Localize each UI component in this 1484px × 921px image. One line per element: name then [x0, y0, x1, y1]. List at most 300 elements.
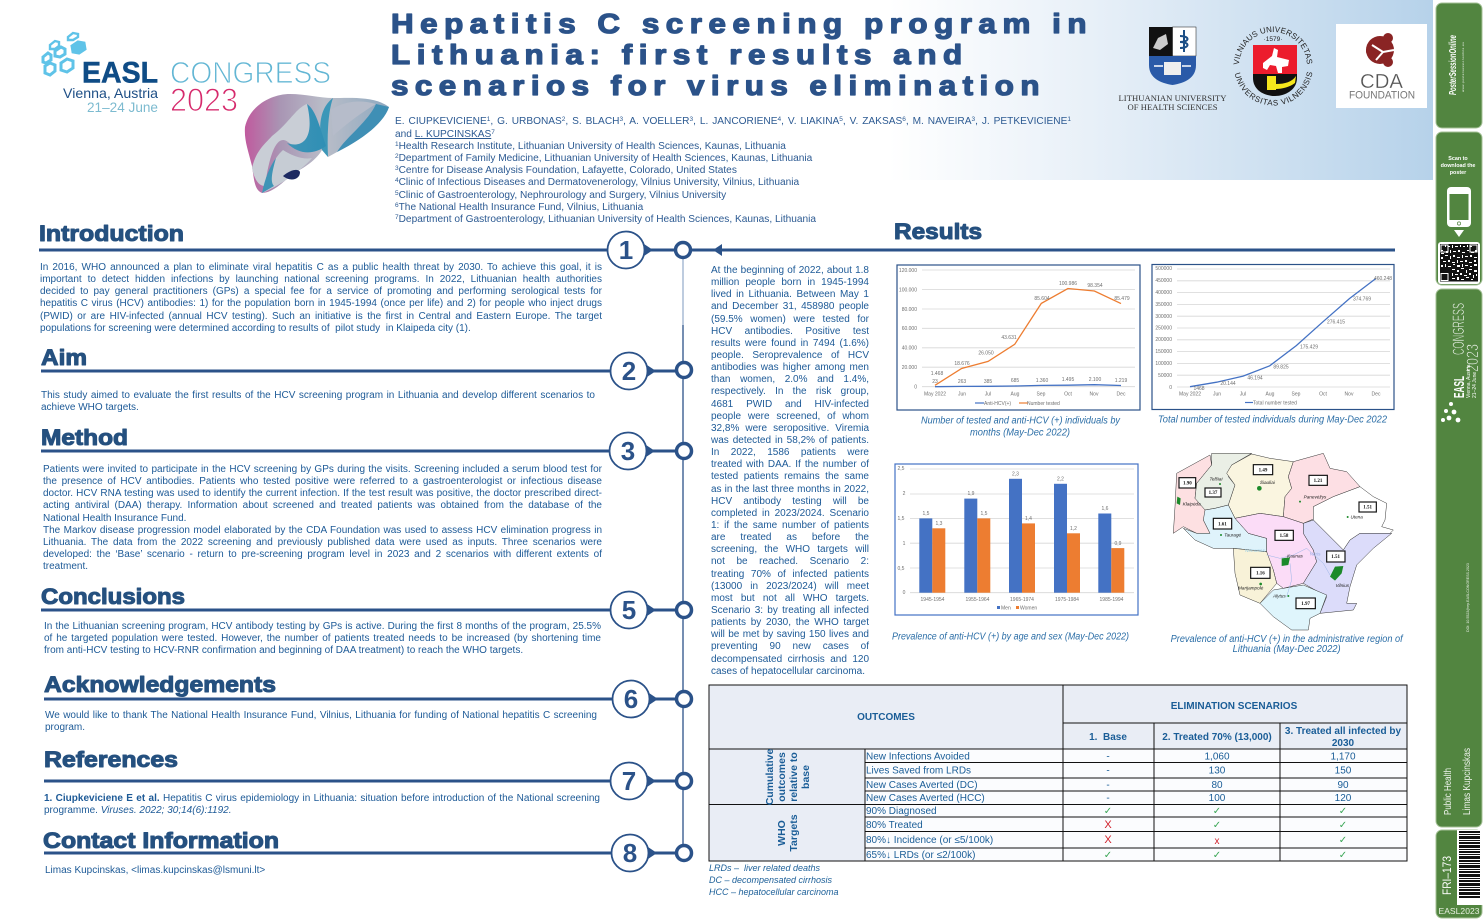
table row: new infections: -: [1106, 752, 1110, 762]
heading: References: References: [44, 747, 178, 772]
text block: results: patients by 2030, the WHO target: [711, 617, 869, 628]
text block: aim: This study aimed to evaluate the first results of the HCV screening program in Lithuania and develop different scenarios to: [41, 390, 595, 401]
heading: Results: Results: [894, 219, 982, 244]
bar chart: prevalence by age and sex: 1,5: [981, 511, 988, 517]
table row: incidence: [866, 834, 1347, 847]
text block: aim: achieve WHO targets.: [41, 402, 139, 413]
sidebar: scan to download panel: download the: [1441, 163, 1475, 169]
marker: number 6: [612, 680, 692, 718]
text block: method: The Markov disease progression model elaborated by the CDA Foundation was used to assess HCV elimination progress in: [43, 525, 602, 536]
text block: introduction: hepatitis C virus (HCV) antibodies: 1) for the population born in 1945-1994 (once per life) and 2) for people who inject drugs: [40, 298, 602, 309]
table row: diagnosed: ✓: [1104, 806, 1112, 817]
map: Lithuania administrative regions: 1.16: [1256, 571, 1265, 576]
logo: Vilnius University seal: [1233, 26, 1312, 106]
text block: introduction: decided to pay general practitioners (GPs) a special fee for a service of promoting and performing serological tests for: [40, 286, 602, 297]
text block: results: screening, the WHO targets will: [711, 544, 869, 555]
text block: references: programme. Viruses. 2022; 30;14(6):1192.: [44, 805, 232, 816]
marker: number 3: 3: [621, 436, 635, 466]
table row: LRDs: ✓: [1339, 850, 1347, 861]
icon: phone: [1447, 187, 1471, 227]
table row: lives saved: 150: [1335, 766, 1352, 776]
text block: conclusions: In the Lithuanian screening program, HCV antibody testing by GPs is active. During the first 8 months of the program, 25.5%: [44, 621, 601, 632]
line chart: tested and anti-HCV by month: 80.000: [902, 307, 917, 313]
logo: Vilnius University seal: UNIVERSITAS VILNENSIS: [1235, 72, 1312, 106]
text block: method: Patients were invited to participate in the HCV screening by GPs during the visits. Screening included a serum blood test for: [43, 464, 602, 475]
line chart: tested and anti-HCV by month: Aug: [1011, 392, 1020, 398]
line chart: total number tested: May 2022: [1179, 392, 1201, 398]
line chart: tested and anti-HCV by month: 685: [1011, 378, 1019, 384]
text block: results: was detected in 58,2% of patients.: [711, 435, 869, 446]
icon: EASL hexagons: [43, 33, 85, 75]
line chart: tested and anti-HCV by month: 1.360: [1036, 378, 1048, 384]
table row: LRDs: [866, 850, 1347, 861]
table: outcomes and elimination scenarios: outcomes: [776, 752, 788, 802]
map: Lithuania administrative regions: Šiauliai: [1260, 479, 1276, 485]
bar chart: prevalence by age and sex: 0: [903, 590, 906, 596]
title: Lithuania: first results and: [391, 40, 962, 71]
authors and affiliations: 5Clinic of Gastroenterology, Nephrourology and Surgery, Vilnius University: [395, 190, 726, 201]
map: Lithuania administrative regions: 1.49: [1259, 468, 1268, 473]
text block: results: 1: if the same number of patients: [711, 520, 869, 531]
line chart: tested and anti-HCV by month: [896, 264, 1141, 438]
bar chart: prevalence by age and sex: 1,5: [898, 516, 905, 522]
heading: Aim: [41, 345, 684, 372]
marker: number 8: 8: [623, 838, 637, 868]
text block: results: (59.5% women) were tested for: [711, 314, 869, 325]
text block: conclusions: [44, 621, 601, 656]
sidebar: congress and presenter panel: 2023: [1463, 344, 1482, 372]
text block: results: In 2022, 1586 patients were: [711, 447, 869, 458]
text block: method: [43, 464, 602, 572]
bar chart: prevalence by age and sex: 1,5: [923, 511, 930, 517]
table: outcomes and elimination scenarios: 3. Treated all infected by: [1285, 726, 1402, 737]
text block: method: Lithuania. The data from the 2022 screening and previously published data were used as inputs. Three scenarios were: [43, 537, 602, 548]
table row: new infections: 1,170: [1330, 752, 1356, 762]
marker: number 8: [612, 834, 692, 872]
line chart: total number tested: 374.769: [1353, 296, 1371, 302]
line chart: tested and anti-HCV by month: Jun: [958, 392, 966, 398]
table row: new infections: New Infections Avoided: [866, 752, 970, 762]
table row: LRDs: ✓: [1104, 850, 1112, 861]
line chart: tested and anti-HCV by month: Oct: [1064, 392, 1072, 398]
marker: number 2: [610, 352, 692, 390]
sidebar: PosterSessionOnline panel: [1436, 2, 1482, 128]
sidebar: congress and presenter panel: Limas Kupcinskas: [1462, 748, 1473, 815]
heading: Acknowledgements: [44, 672, 684, 700]
heading: Conclusions: [41, 584, 684, 612]
line chart: total number tested: 250000: [1155, 326, 1172, 332]
map: Lithuania administrative regions: Telšiai: [1209, 477, 1223, 482]
bar chart: prevalence by age and sex: [892, 463, 1139, 642]
heading: Contact Information: [43, 828, 684, 854]
text block: introduction: (PWID) or are HIV-infected (annual HCV testing). Such an initiative is the first in Central and Eastern Europe. The target: [40, 311, 602, 322]
map: Lithuania administrative regions: Marijampolė: [1238, 586, 1264, 591]
text block: results: lived in Lithuania. Between May 1: [711, 289, 869, 300]
text block: method: the presence of HCV antibodies. Patients who tested positive were referred to a gastroenterologist or infectious disease: [43, 476, 602, 487]
text block: results: will be met by saving 150 lives and: [711, 629, 869, 640]
table row: DC: [866, 780, 1349, 791]
text block: results: than women, 2.0% and 1.4%,: [711, 374, 869, 385]
text block: results: not be reached. Scenario 2:: [711, 556, 869, 567]
line chart: total number tested: 200000: [1155, 337, 1172, 343]
bar chart: prevalence by age and sex: Men: [1001, 606, 1011, 612]
table row: LRDs: ✓: [1213, 850, 1221, 861]
table row: HCC: 100: [1209, 793, 1226, 804]
line chart: tested and anti-HCV by month: 120.000: [899, 268, 917, 274]
line chart: tested and anti-HCV by month: 1.468: [931, 371, 943, 377]
table row: DC: New Cases Averted (DC): [866, 780, 978, 791]
marker: number 2: 2: [622, 356, 636, 386]
line chart: total number tested: 300000: [1155, 314, 1172, 320]
sidebar: congress and presenter panel: Vienna, Austria: [1466, 364, 1472, 398]
table: outcomes and elimination scenarios: OUTCOMES: [857, 712, 915, 723]
bar chart: prevalence by age and sex: 2,2: [1057, 476, 1064, 482]
line chart: total number tested: Nov: [1345, 392, 1354, 398]
authors and affiliations: 2Department of Family Medicine, Lithuanian University of Health Sciences, Kaunas, Lithuania: [395, 153, 812, 164]
sidebar: scan to download panel: Scan to: [1448, 156, 1468, 162]
table abbreviations note: DC – decompensated cirrhosis: [709, 875, 832, 885]
heading: Method: Method: [41, 425, 128, 450]
EASL Congress logo: Vienna, Austria: [63, 85, 158, 101]
text block: method: acting antiviral (DAA) therapy. Information about screened and treated patients was obtained from the database of the: [43, 500, 602, 511]
text block: results: most but not all WHO targets.: [711, 593, 869, 604]
authors and affiliations: and L. KUPCINSKAS7: [395, 129, 495, 140]
heading: Acknowledgements: Acknowledgements: [44, 672, 276, 697]
sidebar: congress and presenter panel: Public Health: [1443, 768, 1454, 815]
map: Lithuania administrative regions: [1170, 453, 1404, 655]
line chart: tested and anti-HCV by month: Dec: [1117, 392, 1126, 398]
heading: Results: [690, 219, 1395, 256]
line chart: total number tested: 460.248: [1374, 276, 1392, 282]
map: Lithuania administrative regions: Klaipėda: [1183, 501, 1201, 506]
line chart: total number tested: 150000: [1155, 349, 1172, 355]
table row: HCC: New Cases Averted (HCC): [866, 793, 985, 804]
table row: incidence: x: [1214, 836, 1220, 847]
line chart: total number tested: 276.415: [1327, 320, 1345, 326]
text block: results: people were screened, of whom: [711, 411, 869, 422]
bar chart: prevalence by age and sex: 2,5: [898, 466, 905, 472]
table: outcomes and elimination scenarios: 2030: [1332, 738, 1355, 749]
authors and affiliations: 4Clinic of Infectious Diseases and Dermatovenerology, Vilnius University, Vilnius, Lithuania: [395, 177, 799, 188]
text block: results: people. Seroprevalence of HCV: [711, 350, 869, 361]
text block: results: HCV antibodies. Positive test: [711, 326, 869, 337]
marker: number 7: [610, 762, 692, 800]
text block: introduction: In 2016, WHO announced a plan to eliminate viral hepatitis C as a public health threat by 2030. To achieve this goal, it is: [40, 262, 602, 273]
line chart: total number tested: 175.429: [1300, 344, 1318, 350]
EASL Congress logo: 21–24 June: [87, 100, 158, 115]
title: [391, 9, 1087, 102]
logo: Lithuanian University of Health Sciences: [1118, 26, 1226, 112]
table: outcomes and elimination scenarios: relative to: [788, 752, 800, 802]
barcode: [1459, 831, 1480, 898]
logo: CDA Foundation: CDA: [1360, 71, 1404, 93]
bar chart: prevalence by age and sex: 1,2: [1070, 526, 1077, 532]
marker: number 1: 1: [619, 235, 633, 265]
line chart: tested and anti-HCV by month: Sep: [1037, 392, 1046, 398]
line chart: tested and anti-HCV by month: Number tested: [1027, 401, 1060, 407]
line chart: tested and anti-HCV by month: May 2022: [924, 392, 946, 398]
table: outcomes and elimination scenarios: ELIMINATION SCENARIOS: [1171, 701, 1298, 712]
line chart: tested and anti-HCV by month: Anti-HCV(+): [984, 401, 1011, 407]
line chart: tested and anti-HCV by month: 100.000: [899, 288, 917, 294]
table abbreviations note: HCC – hepatocellular carcinoma: [709, 887, 839, 897]
sidebar: poster code and barcode panel: [1436, 830, 1482, 918]
sidebar: scan to download panel: [1436, 132, 1482, 286]
text block: introduction: populations for screening were determined according to results of pilot study in Klaipeda city (1).: [40, 323, 471, 334]
line chart: tested and anti-HCV by month: Number of tested and anti-HCV (+) individuals by: [921, 416, 1121, 426]
marker: number 7: 7: [622, 766, 636, 796]
heading: Method: [41, 425, 684, 452]
bar chart: prevalence by age and sex: 1955-1964: [966, 597, 990, 603]
text block: acknowledgements: program.: [45, 722, 85, 733]
line chart: total number tested: [1151, 264, 1395, 426]
line chart: tested and anti-HCV by month: 85.604: [1034, 296, 1050, 302]
map: Lithuania administrative regions: Utena: [1350, 514, 1363, 519]
text block: method: treatment.: [43, 561, 88, 572]
marker: number 1: [608, 232, 690, 268]
text block: results: decompensated cirrhosis and 120: [711, 654, 869, 664]
line chart: tested and anti-HCV by month: 26.050: [978, 350, 994, 356]
text block: acknowledgements: We would like to thank The National Health Insurance Fund, Vilnius, Lithuania for funding of National hepatitis C screening: [45, 710, 597, 721]
line chart: tested and anti-HCV by month: 20.000: [902, 365, 917, 371]
line chart: tested and anti-HCV by month: 1.219: [1115, 378, 1127, 384]
logo: Lithuanian University of Health Sciences: OF HEALTH SCIENCES: [1128, 102, 1218, 112]
line chart: tested and anti-HCV by month: 40.000: [902, 346, 917, 352]
icon: down arrow: [1454, 230, 1464, 237]
text block: results: preventing 90 new cases of: [711, 641, 869, 652]
text block: results: HCV antibody testing will be: [711, 496, 869, 507]
line chart: total number tested: 20.144: [1220, 381, 1236, 387]
line chart: tested and anti-HCV by month: 23: [932, 379, 938, 385]
text block: results: as in the last three months in 2022,: [711, 484, 869, 495]
table row: DC: -: [1106, 780, 1110, 791]
text block: results: 4681 PWID and HIV-infected: [711, 399, 869, 410]
line chart: tested and anti-HCV by month: 0: [914, 384, 917, 390]
bar chart: prevalence by age and sex: 1,4: [1025, 516, 1032, 522]
table row: treated: ✓: [1339, 820, 1347, 831]
heading: Aim: Aim: [41, 345, 87, 370]
logo: Vilnius University seal: ·1579·: [1264, 36, 1282, 43]
table row: diagnosed: [866, 806, 1347, 817]
table row: lives saved: -: [1106, 766, 1110, 776]
bar chart: prevalence by age and sex: 1,9: [968, 491, 975, 497]
table row: diagnosed: 90% Diagnosed: [866, 806, 937, 817]
line chart: tested and anti-HCV by month: Nov: [1090, 392, 1099, 398]
authors and affiliations: [395, 116, 1071, 225]
line chart: tested and anti-HCV by month: 263: [958, 379, 966, 385]
sidebar: congress and presenter panel: DOI: 10.5523/jhep.EASLCONGRESS.2023: [1466, 563, 1470, 632]
logo: Lithuanian University of Health Sciences: LITHUANIAN UNIVERSITY: [1118, 93, 1226, 103]
line chart: total number tested: Total number of tested individuals during May-Dec 2022: [1158, 414, 1387, 426]
authors and affiliations: 1Health Research Institute, Lithuanian University of Health Sciences, Kaunas, Lithuania: [395, 141, 786, 152]
sidebar: scan to download panel: poster: [1450, 170, 1467, 176]
line chart: total number tested: Sep: [1292, 392, 1301, 398]
logo: CDA Foundation: FOUNDATION: [1349, 90, 1415, 102]
heading: Introduction: [39, 221, 683, 252]
text block: references: 1. Ciupkeviciene E et al. Hepatitis C virus epidemiology in Lithuania: situation before introduction of the National screening: [44, 793, 600, 804]
table row: LRDs: 65%↓ LRDs (or ≤2/100k): [866, 850, 975, 861]
bar chart: prevalence by age and sex: 1965-1974: [1010, 597, 1034, 603]
bar chart: prevalence by age and sex: 0,5: [898, 566, 905, 572]
header gradient band: [0, 0, 1433, 180]
line chart: total number tested: 450000: [1155, 278, 1172, 284]
heading: References: [44, 747, 684, 782]
text block: method: developed: the ‘Base’ scenario - return to pre-screening program level in 2023 and 2 scenarios with different extents of: [43, 549, 602, 560]
title: scenarios for virus elimination: [391, 71, 1039, 102]
text block: acknowledgements: [45, 710, 597, 733]
QR code: [1438, 242, 1480, 284]
heading: Conclusions: Conclusions: [41, 584, 185, 609]
sidebar: congress and presenter panel: EASL: [1451, 376, 1468, 398]
table: outcomes and elimination scenarios: Targets: [788, 814, 800, 852]
sidebar: congress and presenter panel: 21–24 June: [1472, 372, 1478, 398]
text block: method: doctor. HCV RNA testing was used to identify the current infection. If the test result was positive, the doctor prescribed direct-: [43, 488, 602, 499]
table row: incidence: 80%↓ Incidence (or ≤5/100k): [866, 835, 993, 846]
line chart: tested and anti-HCV by month: 18.676: [954, 361, 970, 367]
table row: new infections: 1,060: [1204, 752, 1230, 762]
bar chart: prevalence by age and sex: 1945-1954: [921, 597, 945, 603]
table: outcomes and elimination scenarios: WHO: [776, 820, 788, 846]
map: Lithuania administrative regions: 1.51: [1363, 506, 1373, 511]
line chart: tested and anti-HCV by month: 60.000: [902, 326, 917, 332]
authors and affiliations: E. CIUPKEVICIENE1, G. URBONAS2, S. BLACH3, A. VOELLER3, L. JANCORIENE4, V. LIAKINA5, V. ZAKSAS6, M. NAVEIRA3, J. PETKEVICIENE1: [395, 116, 1071, 126]
text block: results: results were found in 7494 (1.6%): [711, 338, 869, 349]
sidebar: poster code and barcode panel: EASL2023: [1438, 906, 1480, 916]
table row: HCC: 120: [1335, 793, 1352, 804]
table row: HCC: [866, 793, 1352, 804]
line chart: total number tested: Aug: [1266, 392, 1275, 398]
table row: HCC: -: [1106, 793, 1110, 804]
bar chart: prevalence by age and sex: 1: [903, 541, 906, 547]
line chart: tested and anti-HCV by month: 2.100: [1089, 377, 1101, 383]
line chart: total number tested: 100000: [1155, 361, 1172, 367]
line chart: total number tested: 0: [1169, 385, 1172, 391]
table row: incidence: X: [1104, 834, 1112, 846]
table abbreviations note: [709, 863, 839, 897]
table row: new infections: [866, 752, 1356, 762]
logo: CDA Foundation: [1336, 24, 1427, 108]
map: Lithuania administrative regions: 1.21: [1314, 479, 1323, 484]
line chart: tested and anti-HCV by month: 385: [984, 379, 992, 385]
map: Lithuania administrative regions: 1.51: [1331, 555, 1341, 560]
text block: results: respectively. In the risk group,: [711, 386, 869, 397]
text block: conclusions: from anti-HCV testing to HCV-RNR confirmation and beginning of DAA treatment) to reach the WHO targets.: [44, 645, 523, 656]
bar chart: prevalence by age and sex: 1985-1994: [1100, 597, 1124, 603]
text block: results: million people born in 1945-1994: [711, 277, 869, 288]
map: Lithuania administrative regions: Tauragė: [1224, 532, 1242, 537]
marker: number 5: [610, 592, 692, 628]
table row: DC: 80: [1211, 780, 1223, 791]
text block: results: [711, 265, 870, 677]
table row: treated: 80% Treated: [866, 820, 923, 831]
map: Lithuania administrative regions: Vilnius: [1336, 583, 1350, 588]
title: Hepatitis C screening program in: [391, 9, 1087, 40]
line chart: tested and anti-HCV by month: 43.631: [1001, 335, 1017, 341]
bar chart: prevalence by age and sex: 1,3: [936, 521, 943, 527]
line chart: total number tested: Oct: [1319, 392, 1327, 398]
map: Lithuania administrative regions: Nemunas: [1245, 548, 1266, 553]
line chart: tested and anti-HCV by month: 100.986: [1059, 281, 1077, 287]
line chart: total number tested: 50000: [1158, 373, 1172, 379]
table: outcomes and elimination scenarios: 2. Treated 70% (13,000): [1162, 732, 1272, 743]
table row: diagnosed: ✓: [1213, 806, 1221, 817]
text block: results: completed in 2023/2024. Scenario: [711, 508, 869, 519]
table row: treated: X: [1104, 819, 1112, 831]
text block: results: cases of hepatocellular carcinoma.: [711, 666, 865, 677]
line chart: total number tested: Total number tested: [1253, 400, 1297, 406]
text block: results: 32,8% were seropositive. Viremia: [711, 423, 869, 434]
bar chart: prevalence by age and sex: 1,6: [1102, 506, 1109, 512]
marker: number 5: 5: [622, 595, 636, 625]
sidebar: poster code and barcode panel: FRI–173: [1440, 856, 1454, 895]
table row: lives saved: 130: [1209, 766, 1226, 776]
table row: diagnosed: ✓: [1339, 806, 1347, 817]
table: outcomes and elimination scenarios: base: [800, 765, 812, 789]
text block: results: At the beginning of 2022, about 1.8: [711, 265, 869, 276]
table row: lives saved: [866, 766, 1352, 776]
table row: DC: 90: [1337, 780, 1349, 791]
icon: liver illustration: [244, 94, 389, 193]
table: outcomes and elimination scenarios: [708, 684, 1408, 862]
bar chart: prevalence by age and sex: Women: [1020, 606, 1037, 612]
map: Lithuania administrative regions: Alytus: [1272, 593, 1286, 598]
table: outcomes and elimination scenarios: Cumulative: [764, 749, 776, 805]
bar chart: prevalence by age and sex: 0,9: [1115, 541, 1122, 547]
table abbreviations note: LRDs – liver related deaths: [709, 863, 820, 873]
line chart: tested and anti-HCV by month: 85.479: [1114, 296, 1130, 302]
heading: Introduction: Introduction: [39, 221, 184, 246]
map: Lithuania administrative regions: 1.58: [1280, 534, 1289, 539]
text block: results: are treated as before the: [711, 532, 869, 543]
text block: conclusions: of he targeted population were tested. However, the number of patients treated needs to be increased (by shortening time: [44, 633, 601, 644]
map: Lithuania administrative regions: Kaunas: [1287, 553, 1304, 558]
marker: number 3: [610, 432, 692, 470]
text block: results: Scenario 3: by treating all infected: [711, 605, 869, 616]
text block: introduction: [40, 262, 602, 334]
line chart: tested and anti-HCV by month: 1.495: [1062, 377, 1074, 383]
line chart: total number tested: 400000: [1155, 290, 1172, 296]
text block: results: (13000 in 2023/2024) will meet: [711, 581, 869, 592]
text block: method: National Health Insurance Fund.: [43, 513, 186, 524]
EASL Congress logo: 2023: [170, 82, 238, 118]
table row: incidence: ✓: [1339, 835, 1347, 846]
line chart: total number tested: 500000: [1155, 266, 1172, 272]
text block: contact: Limas Kupcinskas, <limas.kupcinskas@lsmuni.lt>: [45, 865, 265, 876]
map: Lithuania administrative regions: 1.90: [1183, 482, 1192, 487]
table row: treated: [866, 819, 1347, 831]
text block: aim: [41, 390, 595, 413]
authors and affiliations: 6The National Health Insurance Fund, Vilnius, Lithuania: [395, 202, 643, 213]
line chart: total number tested: 350000: [1155, 302, 1172, 308]
heading: Contact Information: Contact Information: [43, 828, 279, 853]
bar chart: prevalence by age and sex: 1975-1984: [1055, 597, 1079, 603]
text block: references: [44, 793, 600, 816]
map: Lithuania administrative regions: 1.37: [1209, 491, 1218, 496]
authors and affiliations: 7Department of Gastroenterology, Lithuanian University of Health Sciences, Kaunas, Lithuania: [395, 214, 816, 225]
map: Lithuania administrative regions: Prevalence of anti-HCV (+) in the administrative region of: [1171, 634, 1404, 645]
text block: results: tested patients remains the same: [711, 471, 869, 482]
line chart: total number tested: Jul: [1240, 392, 1246, 398]
line chart: tested and anti-HCV by month: 98.354: [1087, 283, 1103, 289]
table row: treated: ✓: [1213, 820, 1221, 831]
EASL Congress logo: [42, 32, 331, 118]
logo: Vilnius University seal: VILNIAUS UNIVERSITETAS: [1233, 26, 1312, 64]
text block: results: treating 70% of infected patients: [711, 569, 869, 580]
table: outcomes and elimination scenarios: 1. Base: [1089, 732, 1127, 743]
line chart: tested and anti-HCV by month: Jul: [985, 392, 991, 398]
bar chart: prevalence by age and sex: 2: [903, 491, 906, 497]
line chart: total number tested: Dec: [1372, 392, 1381, 398]
